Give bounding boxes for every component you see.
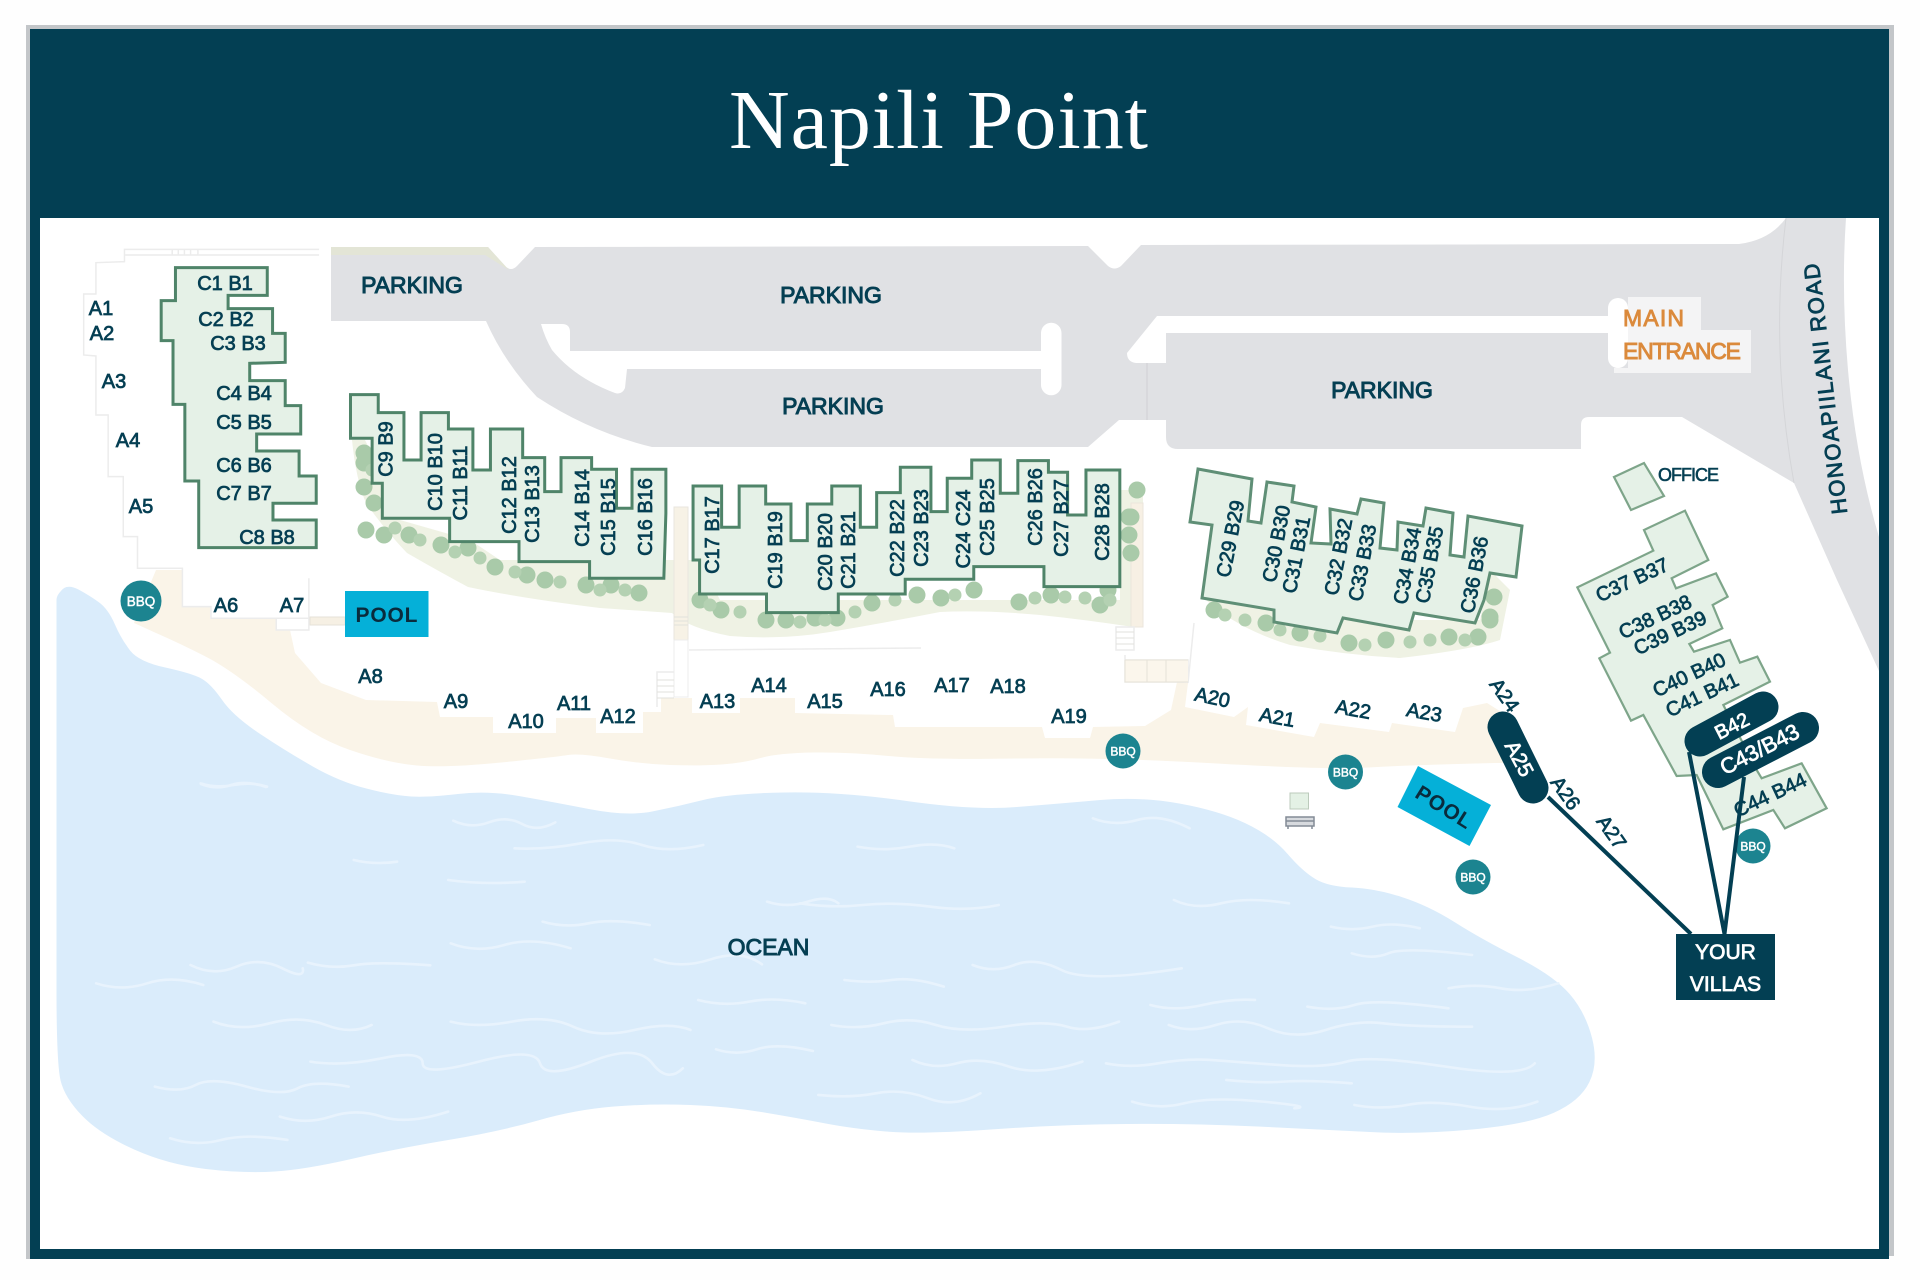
building: C37-C44: C40 B40 — [1650, 649, 1729, 702]
building: C37-C44: C38 B38 — [1616, 591, 1695, 644]
beach villa labels: A12 — [600, 706, 636, 728]
building: C9-C16: C10 B10 — [425, 433, 447, 511]
leader lines — [1548, 752, 1744, 934]
beach villa labels: A7 — [280, 595, 304, 617]
beach villa labels: A14 — [751, 675, 787, 697]
building: C1-C8: C1 B1 — [197, 273, 253, 295]
ocean waves right — [800, 818, 1558, 1109]
building: C1-C8: C4 B4 — [216, 383, 272, 405]
west villa outline — [84, 249, 319, 630]
ocean label: OCEAN — [728, 934, 809, 960]
building: C37-C44: C41 B41 — [1663, 669, 1742, 722]
building: C1-C8: C5 B5 — [216, 412, 272, 434]
building: C1-C8: C8 B8 — [239, 527, 295, 549]
parking labels: PARKING — [780, 282, 882, 308]
BBQ marker north-east — [1736, 828, 1770, 864]
your villas callout: YOUR — [1695, 941, 1756, 964]
building: C9-C16: C15 B15 — [598, 478, 620, 556]
your villas callout — [1676, 934, 1775, 1000]
building: C17-C28: C27 B27 — [1051, 479, 1073, 557]
beach villa labels — [89, 298, 1630, 853]
highlight B42: B42 — [1711, 709, 1753, 745]
landscaping: east — [1204, 570, 1510, 658]
highlight B42 — [1700, 707, 1763, 745]
beach villa labels: A17 — [934, 675, 970, 697]
beach villa labels: A21 — [1258, 704, 1296, 732]
building: C29-C36: C35 B35 — [1412, 525, 1448, 605]
beach villa labels: A27 — [1592, 812, 1630, 853]
beach villa labels: A6 — [214, 595, 238, 617]
building: C17-C28: C21 B21 — [838, 511, 860, 589]
beach villa labels: A8 — [358, 666, 383, 688]
building: C37-C44: C39 B39 — [1631, 607, 1710, 660]
building: C17-C28: C24 C24 — [953, 490, 975, 568]
main entrance label: MAIN — [1623, 305, 1684, 331]
building: C17-C28: C25 B25 — [977, 478, 999, 556]
beach villa labels: A4 — [116, 430, 140, 452]
beach villa labels: A5 — [129, 496, 153, 518]
BBQ marker west — [120, 580, 162, 622]
beach villa labels: A3 — [102, 371, 126, 393]
your villas callout: VILLAS — [1690, 973, 1761, 996]
BBQ marker east pool — [1456, 860, 1490, 894]
building: C9-C16: C16 B16 — [635, 478, 657, 556]
building: C17-C28: C22 B22 — [887, 499, 909, 577]
beach villa labels: A19 — [1051, 706, 1087, 728]
ocean waves left — [96, 783, 838, 1143]
ocean wave small — [201, 783, 266, 787]
building: C17-C28: C28 B28 — [1092, 483, 1114, 561]
building: C29-C36 — [1190, 469, 1522, 633]
building: C1-C8: C6 B6 — [216, 455, 272, 477]
building: C29-C36: C30 B30 — [1259, 504, 1295, 584]
building: C37-C44: C44 B44 — [1731, 769, 1810, 822]
building: C1-C8: C7 B7 — [216, 483, 272, 505]
highlight C43/B43: C43/B43 — [1716, 719, 1803, 780]
beach villa labels: A11 — [557, 693, 591, 715]
parking labels: PARKING — [361, 272, 463, 298]
BBQ marker east beach — [1328, 754, 1363, 790]
beach villa labels: A9 — [444, 691, 468, 713]
building: C9-C16: C12 B12 — [499, 456, 521, 534]
beach villa labels: A23 — [1405, 699, 1443, 727]
pool east: POOL — [1411, 781, 1476, 834]
parking labels — [361, 272, 1433, 419]
walkways — [310, 503, 1194, 707]
building: C9-C16 — [350, 395, 666, 578]
main entrance label: ENTRANCE — [1623, 338, 1741, 364]
building: C9-C16: C14 B14 — [572, 469, 594, 547]
building: C17-C28: C20 B20 — [815, 513, 837, 591]
building: C17-C28: C17 B17 — [702, 496, 724, 574]
beach villa labels: A16 — [870, 679, 906, 701]
building: office — [1614, 463, 1719, 510]
building: C29-C36: C29 B29 — [1213, 499, 1249, 579]
building: C17-C28 — [693, 460, 1120, 613]
beach villa labels: A1 — [89, 298, 113, 320]
building: C17-C28: C23 B23 — [911, 489, 933, 567]
building: C9-C16: C13 B13 — [522, 465, 544, 543]
beach villa labels: A15 — [807, 691, 843, 713]
road label: HONOAPIILANI ROAD — [1799, 262, 1852, 515]
building: C1-C8 — [161, 268, 316, 549]
parking labels: PARKING — [1331, 377, 1433, 403]
title: Napili Point — [729, 74, 1148, 167]
bench and shelter — [1286, 793, 1314, 829]
building: C1-C8: C2 B2 — [198, 309, 254, 331]
building: C37-C44 — [1577, 511, 1827, 829]
ocean — [58, 588, 1593, 1171]
BBQ marker west: BBQ — [127, 594, 155, 609]
trees — [364, 453, 1494, 645]
pool west — [345, 591, 428, 637]
building: C9-C16: C9 B9 — [376, 421, 398, 477]
building: C29-C36: C34 B34 — [1390, 526, 1426, 606]
building: C37-C44: C37 B37 — [1593, 554, 1672, 607]
BBQ marker east pool: BBQ — [1460, 870, 1486, 884]
parking and roads — [331, 218, 1879, 671]
building: C9-C16: C11 B11 — [450, 446, 472, 520]
beach villa labels: A26 — [1546, 773, 1584, 814]
building: C29-C36: C32 B32 — [1321, 517, 1357, 597]
beach villa labels: A18 — [990, 676, 1026, 698]
building: C29-C36: C33 B33 — [1345, 523, 1381, 603]
landscaping: central — [352, 440, 1143, 637]
building: C1-C8: C3 B3 — [210, 333, 266, 355]
highlight A25: A25 — [1500, 737, 1538, 781]
pool west: POOL — [356, 604, 418, 627]
beach villa labels: A13 — [700, 691, 735, 713]
beach villa labels: A24 — [1485, 675, 1523, 716]
building: C29-C36: C31 B31 — [1279, 515, 1315, 595]
beach villa labels: A10 — [508, 711, 544, 733]
building: C29-C36: C36 B36 — [1457, 535, 1493, 615]
BBQ marker central: BBQ — [1110, 744, 1136, 758]
pool east — [1398, 766, 1491, 846]
building: C17-C28: C26 B26 — [1025, 468, 1047, 546]
BBQ marker east beach: BBQ — [1333, 766, 1358, 780]
BBQ marker central — [1106, 734, 1140, 768]
building: C17-C28: C19 B19 — [765, 511, 787, 589]
beach villa labels: A2 — [90, 323, 114, 345]
main entrance label — [1608, 297, 1751, 373]
beach villa labels: A20 — [1193, 684, 1232, 713]
beach villa labels: A22 — [1334, 696, 1372, 724]
building: office: OFFICE — [1658, 465, 1719, 485]
parking labels: PARKING — [782, 393, 884, 419]
BBQ marker north-east: BBQ — [1740, 840, 1766, 854]
map panel — [40, 218, 1879, 1249]
beach sand — [134, 570, 1510, 768]
